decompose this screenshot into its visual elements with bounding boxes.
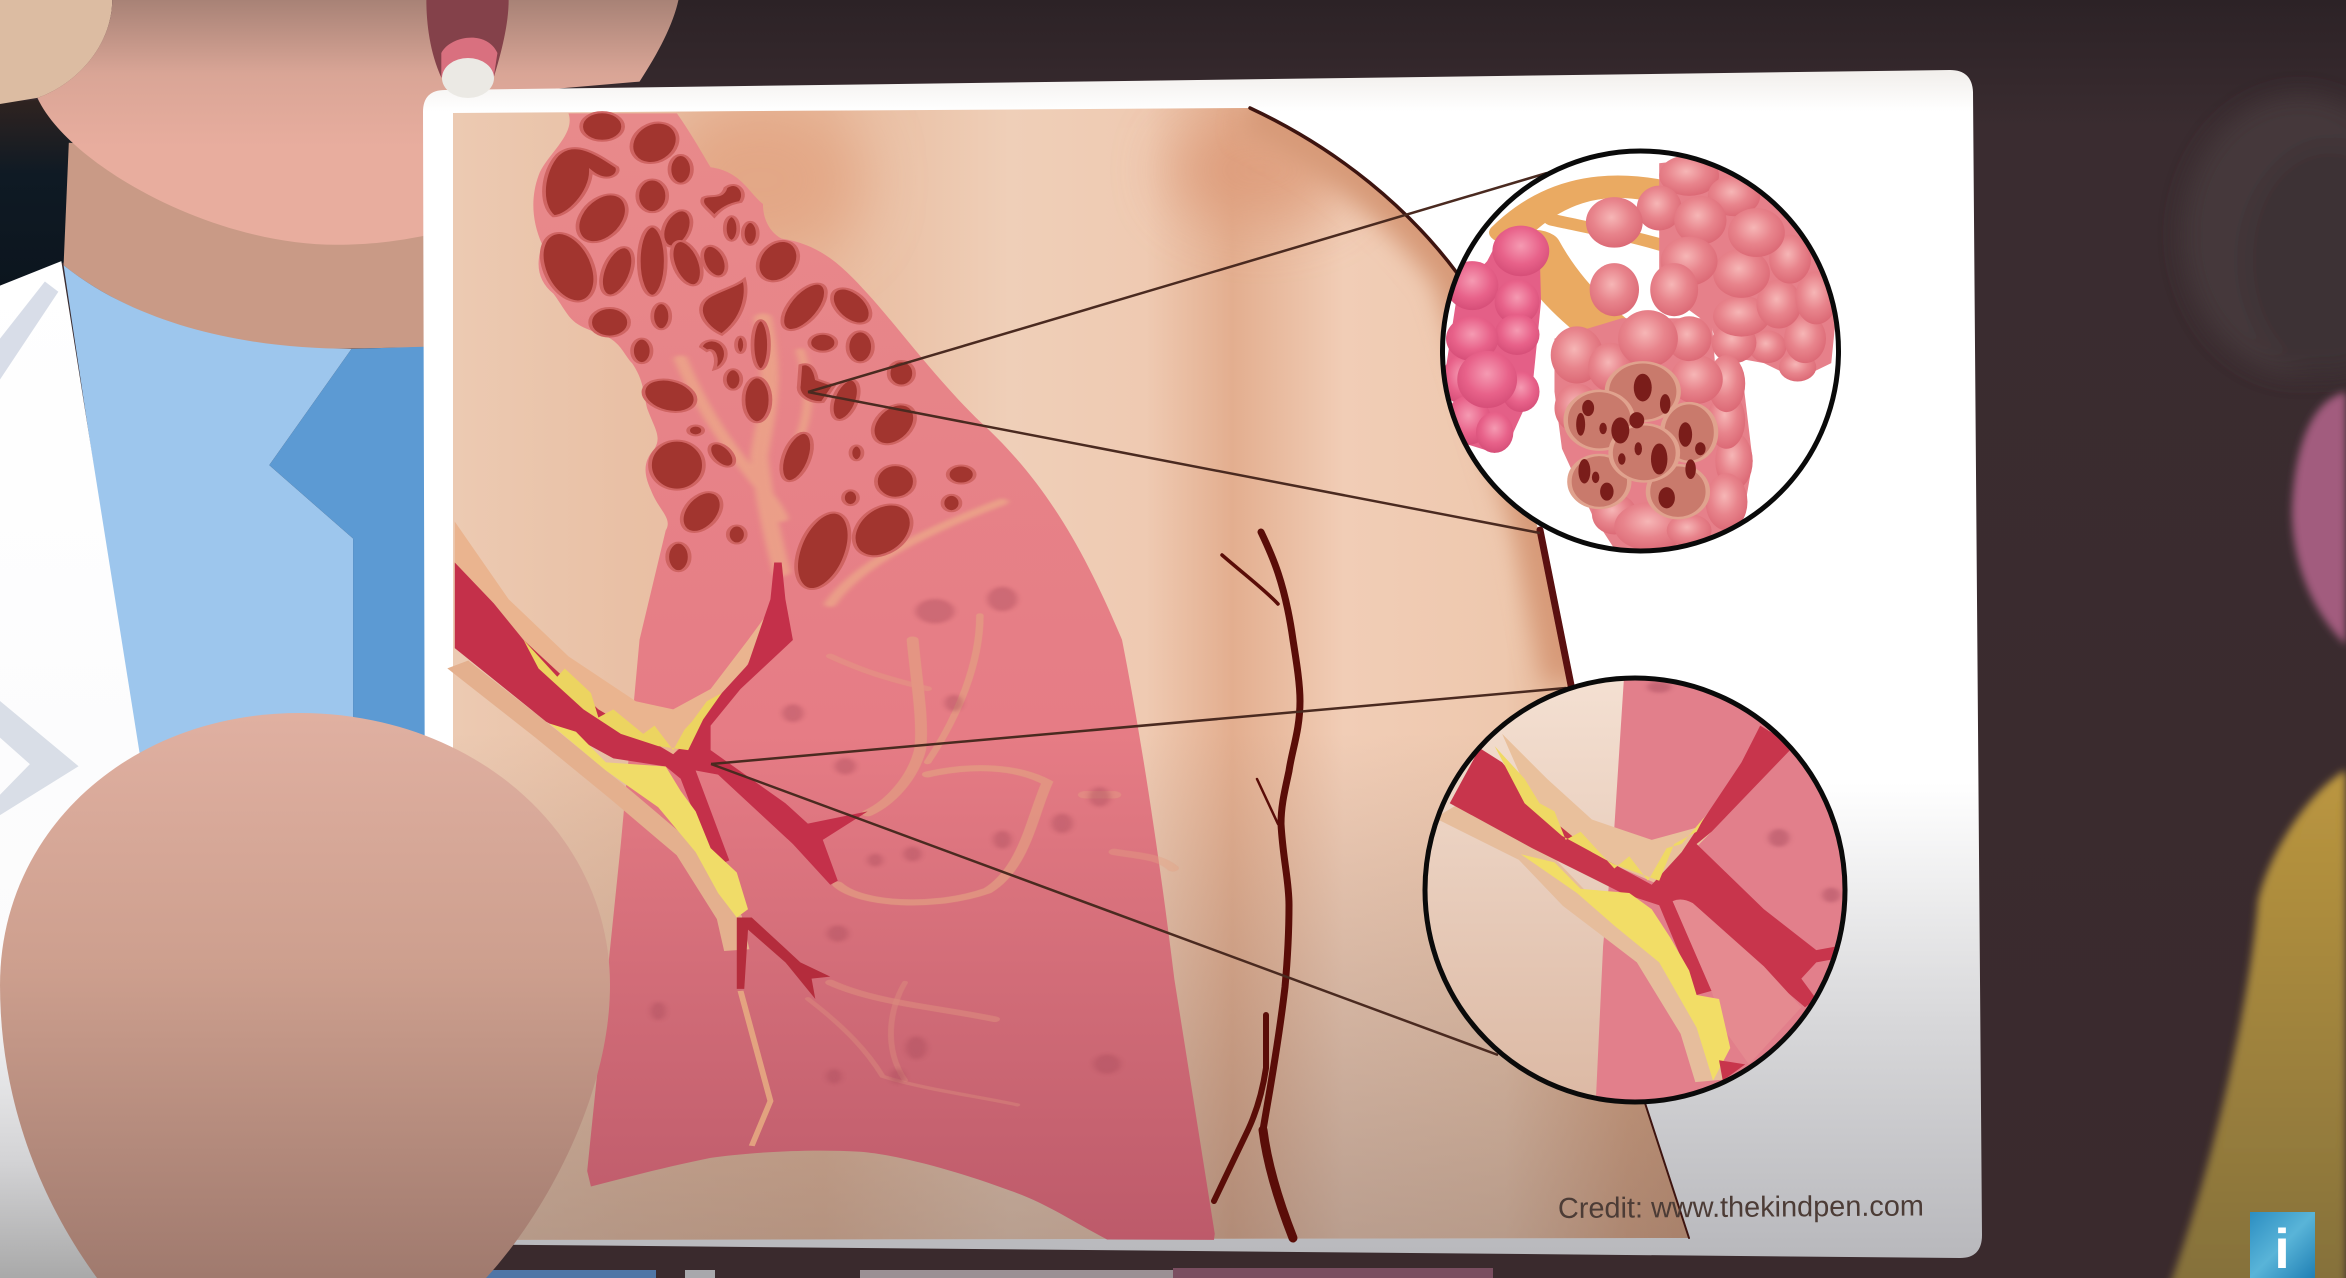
doctor face bbox=[37, 0, 678, 245]
doctor ear bbox=[0, 0, 112, 104]
body silhouette bbox=[453, 100, 1703, 1250]
mucus lower bbox=[550, 724, 748, 917]
upper lung airways bbox=[681, 318, 1002, 604]
lung veins bbox=[808, 615, 1173, 1105]
coat chevron bbox=[0, 701, 79, 815]
blurred background figure: olive clothing bbox=[2168, 770, 2346, 1278]
magnifier circle: bronchus with mucus bbox=[1425, 677, 1850, 1105]
magnified lung spots bbox=[1647, 681, 1840, 902]
magnified small airway bbox=[1719, 1060, 1745, 1081]
bronchi with mucus bbox=[455, 522, 868, 1146]
magnified lower wall bbox=[1446, 811, 1712, 1081]
lab coat bbox=[0, 261, 150, 1278]
red airway bbox=[455, 562, 868, 885]
small airway branches bbox=[737, 917, 830, 999]
peach airway bbox=[741, 991, 770, 1146]
lung mottling bbox=[651, 587, 1121, 1084]
magnified mucus upper bbox=[1495, 746, 1704, 881]
strip below card bbox=[470, 1268, 1493, 1278]
magnified bronchial wall bbox=[1502, 726, 1771, 885]
lung bbox=[533, 112, 1215, 1240]
doctor figure bbox=[0, 0, 678, 1278]
microphone tip bbox=[442, 58, 494, 98]
lower bronchial wall bbox=[458, 664, 737, 950]
magnified red airway bbox=[1450, 726, 1839, 1007]
cut-away alveoli bbox=[1566, 362, 1716, 518]
doctor hair bbox=[0, 100, 97, 286]
logo badge bbox=[2250, 1212, 2315, 1278]
blurred background figure: head bbox=[2182, 95, 2346, 375]
credit text: Credit: www.thekindpen.com bbox=[1558, 1190, 1924, 1225]
mucus upper bbox=[524, 640, 722, 750]
tie bbox=[269, 346, 449, 816]
emphysema holes bbox=[533, 112, 975, 591]
alveoli base fill bbox=[1554, 157, 1835, 549]
pointer lines bbox=[711, 173, 1566, 1055]
left alveoli base fill bbox=[1446, 233, 1541, 453]
bronchial wall bbox=[455, 522, 785, 754]
left alveoli cluster bbox=[1442, 226, 1549, 453]
blurred background figure: pink face bbox=[2292, 392, 2346, 645]
orange bronchioles bbox=[1510, 187, 1674, 339]
white card bbox=[423, 70, 1982, 1258]
coat stripe bbox=[0, 282, 58, 379]
doctor neck shadow bbox=[64, 143, 449, 349]
microphone bbox=[426, 0, 509, 78]
magnified mucus lower bbox=[1521, 854, 1730, 1081]
doctor hand bbox=[0, 713, 610, 1278]
magnifier circle: alveoli bbox=[1442, 151, 1838, 551]
magnified lung island bbox=[1673, 899, 1801, 1064]
body edge lines bbox=[1250, 108, 1689, 1238]
right alveoli cluster bbox=[1551, 155, 1837, 551]
right side vessel bbox=[1214, 532, 1300, 1238]
panel: lung illustration bbox=[453, 100, 1703, 1250]
shirt bbox=[64, 265, 353, 816]
magnified lung tissue bbox=[1596, 677, 1850, 1105]
